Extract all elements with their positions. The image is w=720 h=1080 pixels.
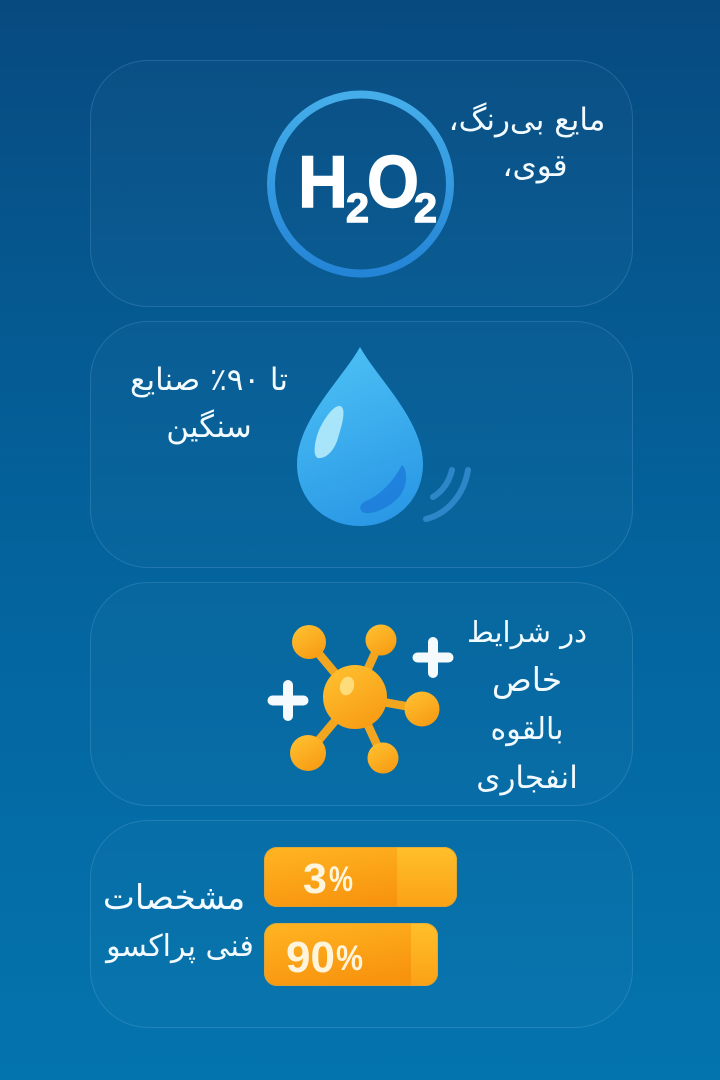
icon: plus upper <box>418 642 448 673</box>
bar: 3 percent: 3 <box>303 855 327 903</box>
text: Peroxo technical specifications <box>103 878 254 964</box>
text: Peroxo technical specifications: فنی پراکسو <box>106 929 254 964</box>
text: potentially explosive under special conditions: خاص <box>492 660 562 699</box>
icon: water drop <box>297 347 468 526</box>
text: colorless liquid, strong: مایع بی‌رنگ، <box>449 102 605 138</box>
panel: molecule card <box>90 582 633 806</box>
text: up to 90% heavy industries: تا ۹۰٪ صنایع <box>130 362 288 398</box>
text: potentially explosive under special conditions: در شرایط <box>467 615 587 649</box>
icon: plus lower <box>272 685 304 716</box>
text: colorless liquid, strong <box>449 102 605 184</box>
panel: water drop card <box>90 321 633 568</box>
text: potentially explosive under special conditions: بالقوه <box>490 712 564 747</box>
text: up to 90% heavy industries: سنگین <box>166 409 252 445</box>
icon: H2O2 circle: 2 <box>414 185 437 231</box>
text: colorless liquid, strong: قوی، <box>502 148 568 184</box>
bar: 90 percent: 90 <box>286 933 335 982</box>
text: Peroxo technical specifications: مشخصات <box>103 878 245 918</box>
icon: H2O2 circle: H <box>298 142 348 223</box>
icon: H2O2 circle: O <box>367 142 419 223</box>
bar: 3 percent: % <box>329 860 353 899</box>
icon: H2O2 circle <box>271 94 450 274</box>
text: potentially explosive under special conditions: انفجاری <box>476 760 578 796</box>
text: up to 90% heavy industries <box>130 362 288 445</box>
panel: H2O2 card <box>90 60 633 307</box>
icon: H2O2 circle: 2 <box>346 185 369 231</box>
text: potentially explosive under special conditions <box>467 615 587 796</box>
bar: 90 percent: % <box>336 939 363 978</box>
panel: specifications card <box>90 820 633 1028</box>
bar: 90 percent <box>264 923 438 986</box>
icon: molecule <box>290 624 440 774</box>
bar: 3 percent <box>264 847 457 907</box>
